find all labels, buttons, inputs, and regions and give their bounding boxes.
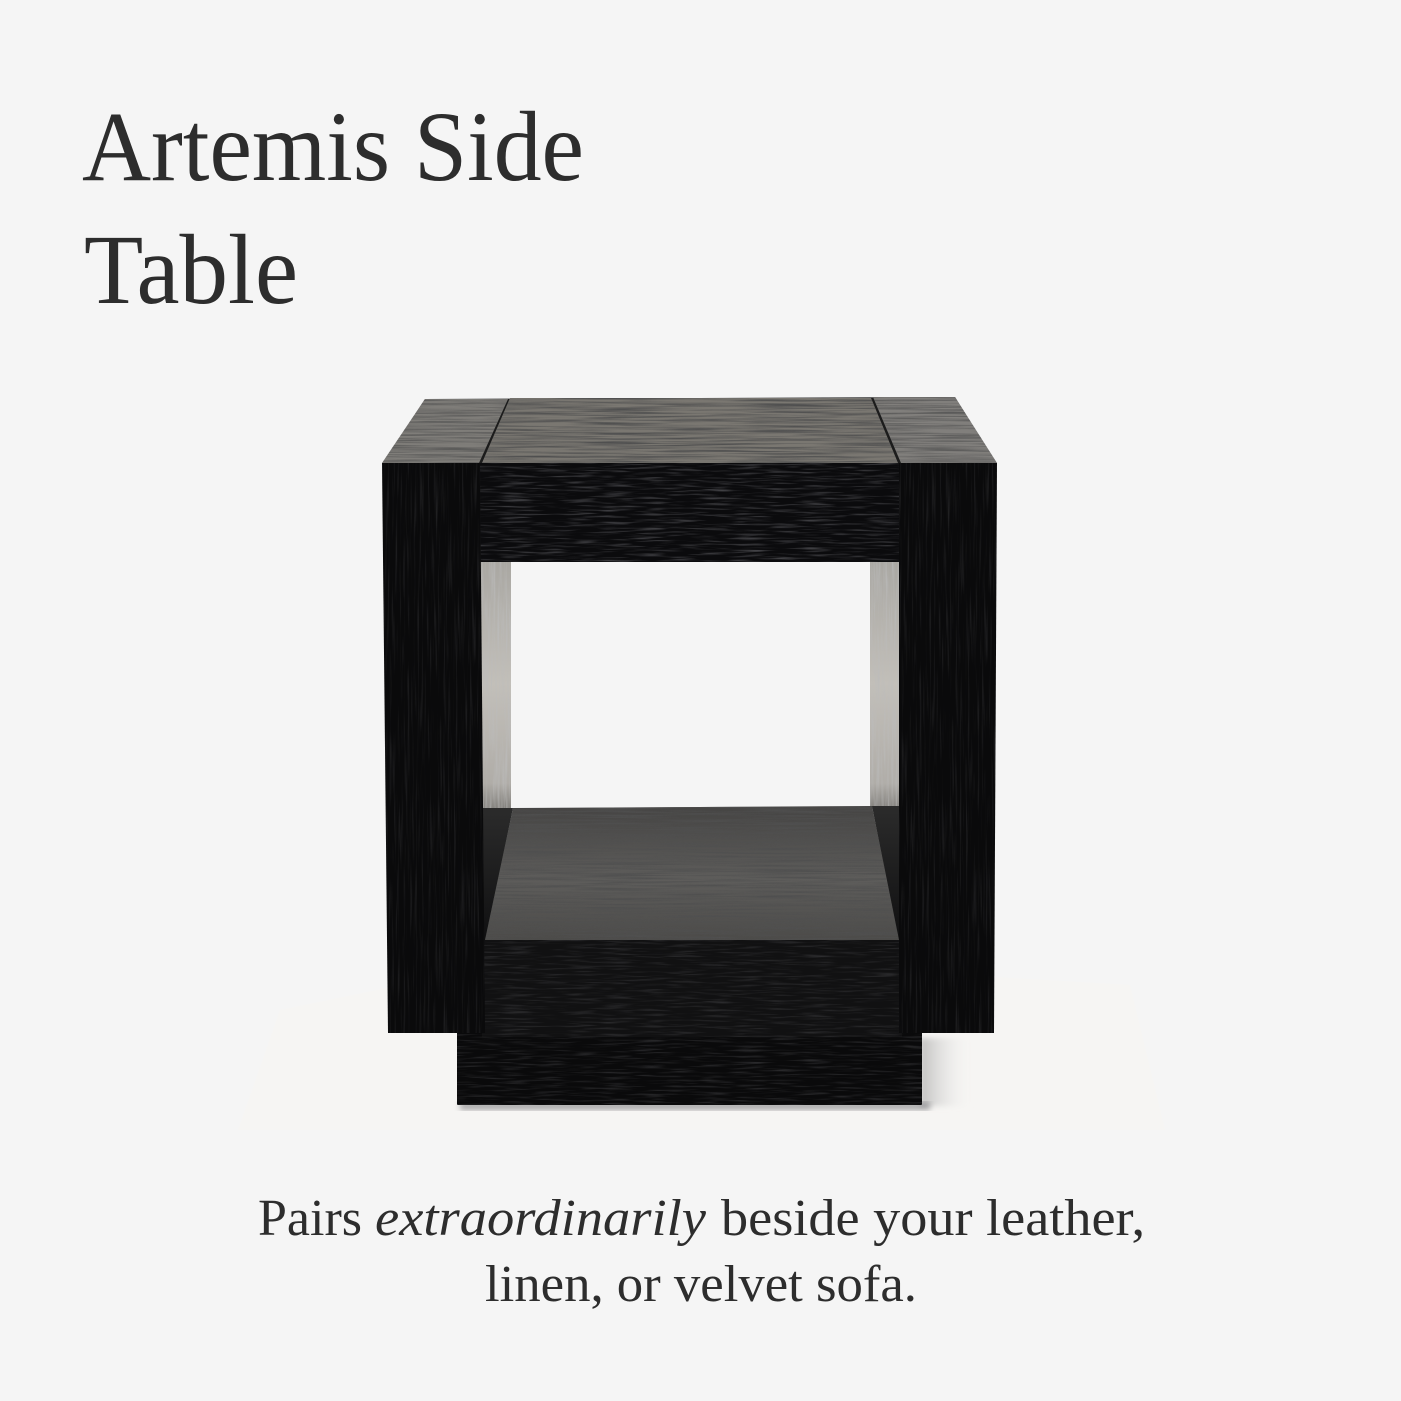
inner left back leg: [480, 560, 511, 808]
lower inner side faces: [480, 806, 902, 945]
caption: Pairs: [258, 1190, 362, 1247]
caption: beside your leather,: [721, 1190, 1145, 1247]
title: Artemis Side: [82, 91, 584, 202]
table top: left panel: [382, 399, 508, 463]
floor shadow: [460, 1038, 972, 1110]
title: Table: [84, 214, 298, 325]
table top: centre panel: [482, 398, 898, 463]
right front leg: [899, 463, 997, 1033]
caption: extraordinarily: [375, 1190, 707, 1247]
product image: side table: [238, 397, 1165, 1130]
lower shelf top: [485, 806, 899, 940]
top apron front: [478, 463, 902, 562]
caption: [258, 1190, 1145, 1313]
table top: base and panel gaps: [382, 397, 997, 465]
table top: right panel: [873, 397, 997, 463]
inner right back leg: [870, 560, 900, 808]
lower shelf front: [482, 940, 902, 1037]
caption: linen, or velvet sofa.: [485, 1256, 917, 1313]
plinth base: [457, 1030, 922, 1105]
floor glow: [238, 975, 1165, 1130]
left front leg: [382, 463, 485, 1033]
title: [82, 91, 584, 325]
